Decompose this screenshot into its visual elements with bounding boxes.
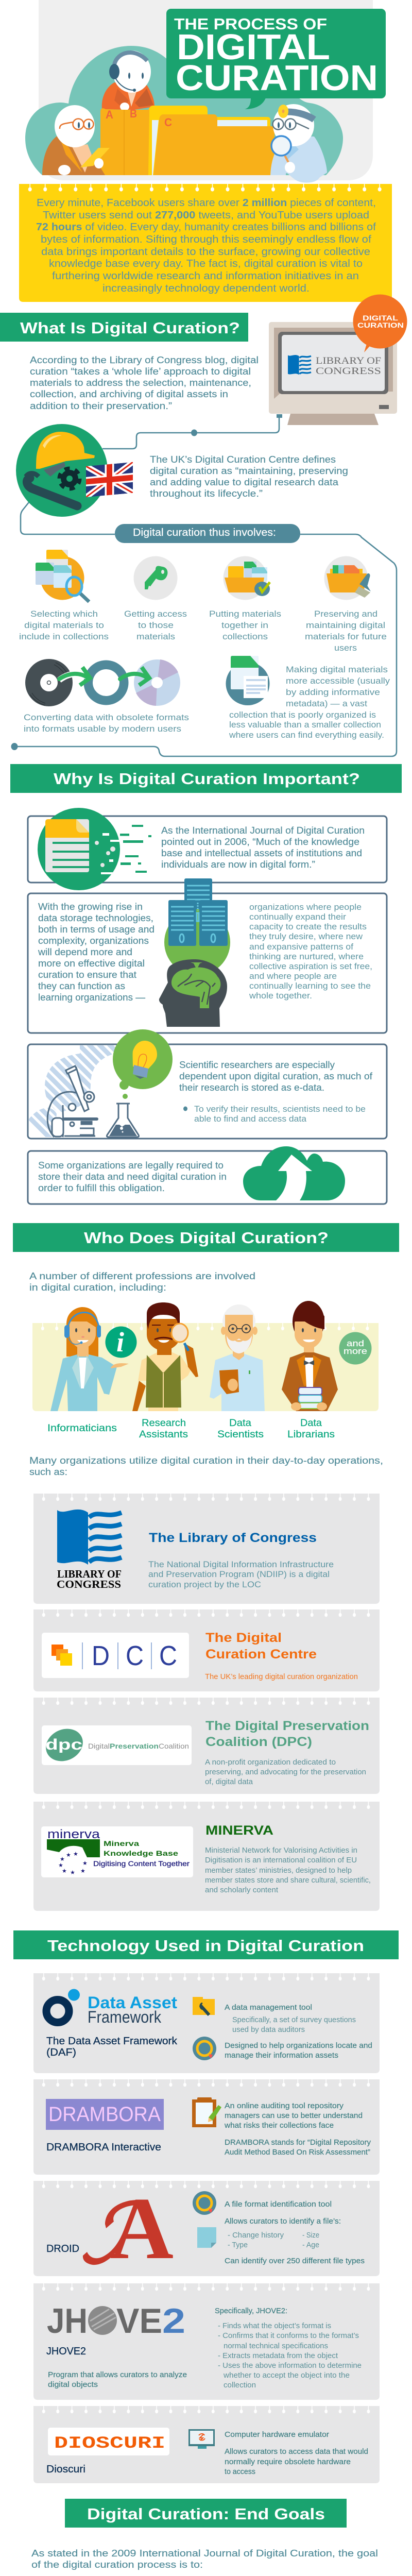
- heading: why is digital curation important: Why Is Digital Curation Important?: [54, 770, 360, 788]
- text: learning organizations left column: complexity, organizations: [38, 936, 149, 946]
- heading: who does digital curation: [13, 1223, 399, 1252]
- text: making digital materials accessible: less valuable than a smaller collection: [229, 720, 381, 730]
- panel: dioscuri: Computer hardware emulator: [225, 2430, 329, 2439]
- logo: jhove2: JH: [47, 2301, 88, 2341]
- panel: international journal quote: As the International Journal of Digital Curation: [161, 825, 365, 836]
- panel: minerva: Ministerial Network for Valorising Activities in: [205, 1846, 357, 1855]
- icon: information bubble: [105, 1326, 137, 1358]
- panel: digital curation centre: [33, 1609, 380, 1691]
- panel: jhove2: - Finds what the object’s format is: [218, 2321, 331, 2330]
- panel: data asset framework: Designed to help organizations locate and: [225, 2041, 372, 2050]
- intro panel: knowledge base every day. The fact is, digital curation is vital to: [49, 258, 363, 269]
- panel: drambora: managers can use to better understand: [225, 2111, 363, 2120]
- icon: lightbulb thought bubble: [113, 1029, 173, 1099]
- panel: library of congress: [33, 1494, 380, 1604]
- connector line around involves section: [11, 502, 397, 756]
- logo: minerva: ★: [80, 1868, 85, 1874]
- icon: document with metadata: [226, 656, 270, 705]
- icon: flask: [107, 1104, 139, 1137]
- panel: data asset framework: manage their information assets: [225, 2051, 338, 2060]
- text: learning organizations right column: and where people are: [249, 971, 337, 981]
- panel: learning organizations: [28, 878, 387, 1033]
- text: learning organizations right column: organizations where people: [249, 902, 362, 912]
- character: data librarian: [282, 1301, 338, 1411]
- panel: jhove2: JHOVE2: [46, 2346, 86, 2357]
- panel: jhove2: - Confirms that it conforms to the format’s: [218, 2331, 359, 2340]
- logo: minerva: minerva: [47, 1827, 100, 1841]
- logo: data asset framework: [46, 1989, 177, 2026]
- intro panel: data brings important details to the surface, growing our collective: [41, 246, 370, 258]
- text: preserving: materials for future: [305, 632, 387, 641]
- text: professions intro: in digital curation, including:: [29, 1282, 166, 1293]
- icon: folder with brush: [324, 556, 371, 600]
- profession labels: Data: [229, 1418, 251, 1429]
- intro panel: [19, 184, 392, 302]
- panel: droid: - Size: [302, 2231, 319, 2240]
- icon: servers above head with brain: [159, 878, 230, 1027]
- logo: minerva: Minerva: [104, 1839, 139, 1848]
- logo: DCC: [42, 1633, 189, 1678]
- icon: target ring: [193, 2191, 216, 2215]
- text: learning organizations right column: collective aspiration is set free,: [249, 961, 372, 971]
- panel: digital preservation coalition: The Digital Preservation: [205, 1719, 369, 1733]
- character: clipboard curator: [42, 105, 110, 175]
- character: informatician: [50, 1307, 129, 1411]
- hero illustration panel: [25, 0, 373, 183]
- text: learning organizations right column: continually learning to see the: [249, 981, 371, 991]
- panel: droid: - Type: [228, 2241, 248, 2249]
- logo: minerva: ★: [66, 1852, 71, 1858]
- panel: jhove2: Program that allows curators to analyze: [48, 2370, 187, 2379]
- panel: international journal quote: [28, 808, 387, 890]
- icon: record to disk conversion: [25, 659, 180, 706]
- text: UK digital curation centre definition: and adding value to digital research data: [150, 477, 339, 487]
- title speech bubble: [166, 9, 386, 109]
- folders A B C: B: [130, 107, 137, 120]
- character: data scientist: [210, 1304, 265, 1411]
- logo: data asset framework: Data Asset: [88, 1993, 177, 2012]
- text: learning organizations right column: capacity to create the results: [249, 922, 367, 931]
- panel: jhove2: digital objects: [48, 2380, 98, 2389]
- panel: digital preservation coalition: [33, 1698, 380, 1794]
- text: putting materials: [209, 609, 281, 641]
- profession labels: Informaticians: [47, 1423, 117, 1434]
- logo: DPC: Preservation: [110, 1742, 159, 1750]
- intro panel: Twitter users send out 277,000 tweets, and YouTube users upload: [43, 210, 369, 221]
- logo: jhove2: [47, 2301, 185, 2341]
- panel: minerva: member states’ ministries, designed to help: [205, 1866, 352, 1875]
- text: learning organizations right column: continually expand their: [249, 912, 346, 922]
- panel: digital curation centre: The Digital: [205, 1631, 282, 1645]
- text: selecting which: Selecting which: [30, 609, 98, 619]
- character: research assistant: [132, 1302, 198, 1411]
- text: making digital materials accessible: collection that is poorly organized is: [229, 710, 376, 720]
- heading: what is digital curation: What Is Digital Curation?: [20, 319, 240, 337]
- icon: hard hat, wrench, gear and UK flag: [16, 424, 133, 517]
- panel: jhove2: Specifically, JHOVE2:: [215, 2307, 287, 2315]
- text: library of congress definition: addition to their preservation.”: [30, 401, 172, 411]
- panel: data asset framework: The Data Asset Framework: [46, 2036, 178, 2047]
- text: making digital materials accessible: metadata) — a vast: [286, 699, 367, 708]
- panel: drambora: An online auditing tool repository: [225, 2102, 344, 2110]
- panel: library of congress: and Preservation Program (NDIIP) is a digital: [148, 1569, 330, 1579]
- panel: drambora: DRAMBORA Interactive: [46, 2142, 161, 2153]
- panel: drambora: Audit Method Based On Risk Assessment”: [225, 2148, 370, 2157]
- intro panel: bytes of information. Sifting through this seemingly endless flow of: [41, 234, 371, 245]
- callout: digital curation bubble: [353, 295, 407, 352]
- callout: digital curation bubble: CURATION: [357, 321, 404, 329]
- logo: minerva: ★: [58, 1862, 63, 1869]
- text: converting data: [24, 713, 189, 734]
- panel: data asset framework: A data management tool: [225, 2003, 312, 2012]
- text: getting access: to those: [138, 620, 174, 630]
- panel: scientific researchers: To verify their results, scientists need to be: [194, 1104, 366, 1114]
- title speech bubble: DIGITAL: [177, 27, 330, 67]
- text: professions intro: [29, 1271, 255, 1293]
- text: selecting which: [19, 609, 109, 641]
- callout: and more: more: [344, 1346, 367, 1356]
- logo: DCC: C: [126, 1640, 144, 1671]
- icon: monitor with library of congress logo: CONGRESS: [316, 366, 381, 377]
- logo: minerva: Knowledge Base: [104, 1849, 178, 1857]
- text: end goals intro: [31, 2548, 378, 2570]
- icon: note sheet: [197, 2227, 216, 2248]
- panel: minerva: and scholarly content: [205, 1886, 279, 1894]
- text: selecting which: include in collections: [19, 632, 109, 641]
- panel: library of congress: The National Digital Information Infrastructure: [148, 1560, 334, 1569]
- panel: minerva: member states store and share cultural, scientific,: [205, 1876, 371, 1885]
- icon: monitor with library of congress logo: [269, 322, 397, 425]
- intro panel: Every minute, Facebook users share over 2 million pieces of content,: [37, 197, 376, 209]
- icon: folder with wrench: [193, 1997, 215, 2015]
- logo: jhove2: 2: [162, 2301, 185, 2341]
- text: getting access: Getting access: [124, 609, 187, 619]
- panel: legal requirement: store their data and need digital curation in: [38, 1172, 227, 1182]
- panel: data asset framework: [33, 1973, 380, 2073]
- text: organizations intro: such as:: [29, 1467, 67, 1477]
- icon: microscope: [47, 1066, 97, 1137]
- icon: monitor with library of congress logo: LIBRARY OF: [316, 355, 381, 366]
- text: learning organizations left column: With the growing rise in: [38, 902, 143, 912]
- panel: legal requirement: order to fulfill this obligation.: [38, 1183, 165, 1193]
- icon: target ring: [193, 2037, 216, 2060]
- panel: digital preservation coalition: of, digital data: [205, 1777, 253, 1786]
- text: library of congress definition: According to the Library of Congress blog, digital: [30, 355, 259, 365]
- panel: droid: Can identify over 250 different file types: [225, 2257, 365, 2265]
- panel: data asset framework: used by data auditors: [232, 2025, 305, 2034]
- panel: jhove2: collection: [224, 2381, 256, 2389]
- title speech bubble: CURATION: [176, 58, 378, 98]
- panel: scientific researchers: their research is stored as e-data.: [179, 1082, 324, 1093]
- panel: droid: A file format identification tool: [225, 2200, 332, 2209]
- text: making digital materials accessible: more accessible (usually: [286, 676, 390, 686]
- text: learning organizations left column: more on effective digital: [38, 958, 145, 969]
- panel: digital preservation coalition: Coalition (DPC): [205, 1735, 312, 1749]
- text: UK digital curation centre definition: throughout its lifecycle.”: [150, 488, 263, 499]
- text: putting materials: Putting materials: [209, 609, 281, 619]
- logo: minerva: [41, 1826, 193, 1877]
- intro panel: 72 hours of video. Every day, humanity creates billions and billions of: [36, 222, 376, 233]
- profession labels: Research: [142, 1418, 186, 1429]
- text: getting access: [124, 609, 187, 641]
- panel: droid: [33, 2180, 380, 2278]
- profession labels: [47, 1418, 335, 1440]
- text: converting data: into formats usable by modern users: [24, 724, 181, 734]
- text: learning organizations left column: both in terms of usage and: [38, 924, 154, 935]
- logo: library of congress: LIBRARY OF: [57, 1568, 122, 1580]
- panel: dioscuri: to access: [225, 2467, 255, 2476]
- text: learning organizations left column: data storage technologies,: [38, 913, 153, 923]
- text: library of congress definition: [30, 355, 259, 411]
- text: preserving: users: [334, 643, 357, 653]
- text: UK digital curation centre definition: The UK’s Digital Curation Centre defines: [150, 454, 336, 465]
- panel: jhove2: - Uses the above information to determine: [218, 2361, 362, 2370]
- title speech bubble: THE PROCESS OF: [174, 15, 327, 33]
- panel: data asset framework: (DAF): [46, 2047, 76, 2058]
- panel: droid: - Change history: [228, 2231, 284, 2240]
- text: learning organizations right column: they truly desire, where new: [249, 931, 363, 941]
- logo: minerva: ★: [73, 1851, 78, 1857]
- panel: legal requirement: Some organizations are legally required to: [38, 1160, 224, 1171]
- connector line: monitor to hard hat: [102, 414, 282, 449]
- panel: scientific researchers: [28, 1029, 387, 1139]
- heading: why is digital curation important: [10, 764, 402, 793]
- panel: scientific researchers: Scientific researchers are especially: [179, 1060, 335, 1070]
- panel: legal requirement: [28, 1146, 387, 1204]
- logo: dioscuri: DIOSCURI: [54, 2434, 165, 2453]
- callout: and more: [339, 1332, 372, 1364]
- panel: scientific researchers: able to find and access data: [194, 1114, 307, 1124]
- panel: international journal quote: pointed out in 2006, “Much of the knowledge: [161, 837, 359, 847]
- panel: minerva: [33, 1802, 380, 1911]
- icon: folder with check: [224, 556, 270, 600]
- logo: DCC: C: [159, 1640, 177, 1671]
- text: making digital materials accessible: where users can find everything easily.: [229, 730, 384, 740]
- text: organizations intro: [29, 1455, 383, 1477]
- callout: and more: and: [347, 1338, 364, 1348]
- text: end goals intro: of the digital curation process is to:: [31, 2560, 203, 2570]
- panel: droid: Allows curators to identify a file’s:: [225, 2217, 341, 2226]
- text: learning organizations left column: curation to ensure that: [38, 970, 136, 980]
- text: learning organizations left column: learning organizations —: [38, 992, 145, 1003]
- icon: clipboard with pencil: [192, 2097, 221, 2127]
- panel: international journal quote: individuals are now in digital form.”: [161, 859, 315, 870]
- panel: dioscuri: Allows curators to access data that would: [225, 2447, 368, 2456]
- intro panel: furthering worldwide research and information initiatives in an: [52, 270, 359, 282]
- heading: what is digital curation: [0, 313, 248, 342]
- text: converting data: Converting data with obsolete formats: [24, 713, 189, 722]
- panel: professions illustration: [32, 1301, 379, 1411]
- text: learning organizations left column: [38, 902, 154, 1003]
- logo: minerva: ★: [82, 1860, 88, 1867]
- text: library of congress definition: materials to address the selection, maintenance,: [30, 378, 251, 388]
- logo: DPC: Digital: [88, 1742, 110, 1750]
- heading: end goals: Digital Curation: End Goals: [87, 2505, 325, 2523]
- heading: who does digital curation: Who Does Digital Curation?: [84, 1229, 329, 1247]
- panel: scientific researchers: dependent upon digital curation, as much of: [179, 1071, 373, 1081]
- text: library of congress definition: curation “takes a ‘whole life’ approach to digital: [30, 366, 251, 377]
- panel: international journal quote: base and intellectual assets of institutions and: [161, 848, 362, 858]
- text: UK digital curation centre definition: [150, 454, 348, 499]
- panel: dioscuri: Dioscuri: [46, 2464, 85, 2475]
- panel: digital curation centre: Curation Centre: [205, 1647, 317, 1662]
- icon: key: [134, 556, 177, 600]
- panel: library of congress: curation project by the LOC: [148, 1580, 261, 1589]
- logo: DPC: dpc: [45, 1736, 82, 1753]
- logo: minerva: ★: [60, 1856, 65, 1862]
- logo: data asset framework: Framework: [88, 2008, 162, 2026]
- profession labels: Assistants: [139, 1429, 188, 1440]
- panel: digital curation centre: The UK’s leading digital curation organization: [205, 1672, 358, 1681]
- text: professions intro: A number of different professions are involved: [29, 1271, 255, 1281]
- panel: drambora: what risks their collections face: [224, 2121, 334, 2130]
- panel: drambora: [33, 2079, 380, 2175]
- logo: library of congress: [57, 1510, 122, 1590]
- icon: selecting documents with magnifier: [36, 550, 89, 602]
- text: learning organizations left column: will depend more and: [38, 947, 132, 957]
- panel: jhove2: [33, 2283, 380, 2400]
- logo: droid letter A: A: [110, 2180, 174, 2278]
- text: learning organizations right column: whole together.: [249, 991, 312, 1001]
- logo: drambora: DRAMBORA: [48, 2103, 161, 2126]
- logo: DPC: Coalition: [159, 1742, 189, 1750]
- logo: DCC: D: [92, 1640, 110, 1671]
- heading: technology used: [13, 1930, 399, 1959]
- panel: minerva: MINERVA: [205, 1823, 273, 1838]
- text: putting materials: collections: [222, 632, 268, 641]
- panel: dioscuri: normally require obsolete hardware: [225, 2458, 351, 2466]
- icon: information bubble: i: [116, 1327, 124, 1358]
- logo: library of congress: CONGRESS: [57, 1578, 121, 1590]
- text: UK digital curation centre definition: digital curation as “maintaining, preserving: [150, 466, 348, 476]
- heading: technology used: Technology Used in Digital Curation: [47, 1937, 364, 1955]
- panel: droid: DROID: [46, 2243, 79, 2255]
- character: magnifier curator: [270, 104, 327, 183]
- profession labels: Data: [300, 1418, 322, 1429]
- panel: minerva: Digitisation is an international coalition of EU: [205, 1856, 357, 1865]
- logo: minerva: ★: [62, 1868, 67, 1874]
- text: making digital materials accessible: Making digital materials: [286, 665, 388, 674]
- text: learning organizations left column: they can function as: [38, 981, 125, 991]
- panel: dioscuri: [33, 2406, 380, 2483]
- text: library of congress definition: collection, and archiving of digital assets in: [30, 389, 228, 399]
- subheading pill: digital curation thus involves: [115, 524, 300, 543]
- callout: digital curation bubble: DIGITAL: [363, 314, 399, 322]
- text: making digital materials accessible: by adding informative: [286, 687, 380, 697]
- profession labels: Scientists: [217, 1429, 264, 1440]
- text: learning organizations right column: thinking are nurtured, where: [249, 952, 364, 961]
- logo: dioscuri: [48, 2428, 169, 2455]
- text: making digital materials accessible: [229, 665, 390, 740]
- text: organizations intro: Many organizations utilize digital curation in their day-to-day operations,: [29, 1455, 383, 1466]
- text: preserving: maintaining digital: [306, 620, 385, 630]
- text: putting materials: together in: [221, 620, 268, 630]
- text: preserving: Preserving and: [314, 609, 377, 619]
- panel: drambora: DRAMBORA stands for “Digital Repository: [225, 2138, 371, 2147]
- logo: minerva: ★: [70, 1870, 75, 1876]
- text: learning organizations right column: and expansive patterns of: [249, 942, 353, 952]
- icon: dna helix: [29, 1045, 117, 1137]
- panel: droid: - Age: [302, 2241, 319, 2249]
- icon: digitized document: [38, 808, 151, 890]
- character: headset curator: [102, 50, 154, 111]
- heading: end goals: [65, 2499, 347, 2528]
- logo: jhove2: VE: [116, 2301, 162, 2341]
- icon: cloud upload: [243, 1146, 345, 1200]
- panel: jhove2: whether to accept the object into the: [223, 2371, 350, 2380]
- intro panel: increasingly technology dependent world.: [102, 283, 310, 294]
- text: preserving: [305, 609, 387, 653]
- profession labels: Librarians: [287, 1429, 335, 1440]
- logo: DPC: [41, 1723, 192, 1767]
- text: learning organizations right column: [249, 902, 372, 1001]
- text: selecting which: digital materials to: [24, 620, 104, 630]
- panel: jhove2: - Extracts metadata from the object: [218, 2351, 338, 2360]
- folders A B C: C: [164, 116, 172, 129]
- text: getting access: materials: [136, 632, 175, 641]
- panel: library of congress: The Library of Congress: [149, 1531, 317, 1545]
- folders A B C: A: [106, 108, 113, 121]
- text: end goals intro: As stated in the 2009 International Journal of Digital Curation, the goal: [31, 2548, 378, 2558]
- panel: digital preservation coalition: preserving, and advocating for the preservation: [205, 1768, 366, 1776]
- panel: jhove2: normal technical specifications: [224, 2342, 328, 2350]
- panel: data asset framework: Specifically, a set of survey questions: [232, 2015, 356, 2024]
- panel: digital preservation coalition: A non-profit organization dedicated to: [205, 1758, 336, 1767]
- icon: monitor emulator: [188, 2429, 215, 2449]
- folders A B C: [100, 106, 274, 175]
- logo: minerva: Digitising Content Together: [93, 1859, 190, 1868]
- subheading pill: digital curation thus involves: Digital curation thus involves:: [133, 527, 276, 538]
